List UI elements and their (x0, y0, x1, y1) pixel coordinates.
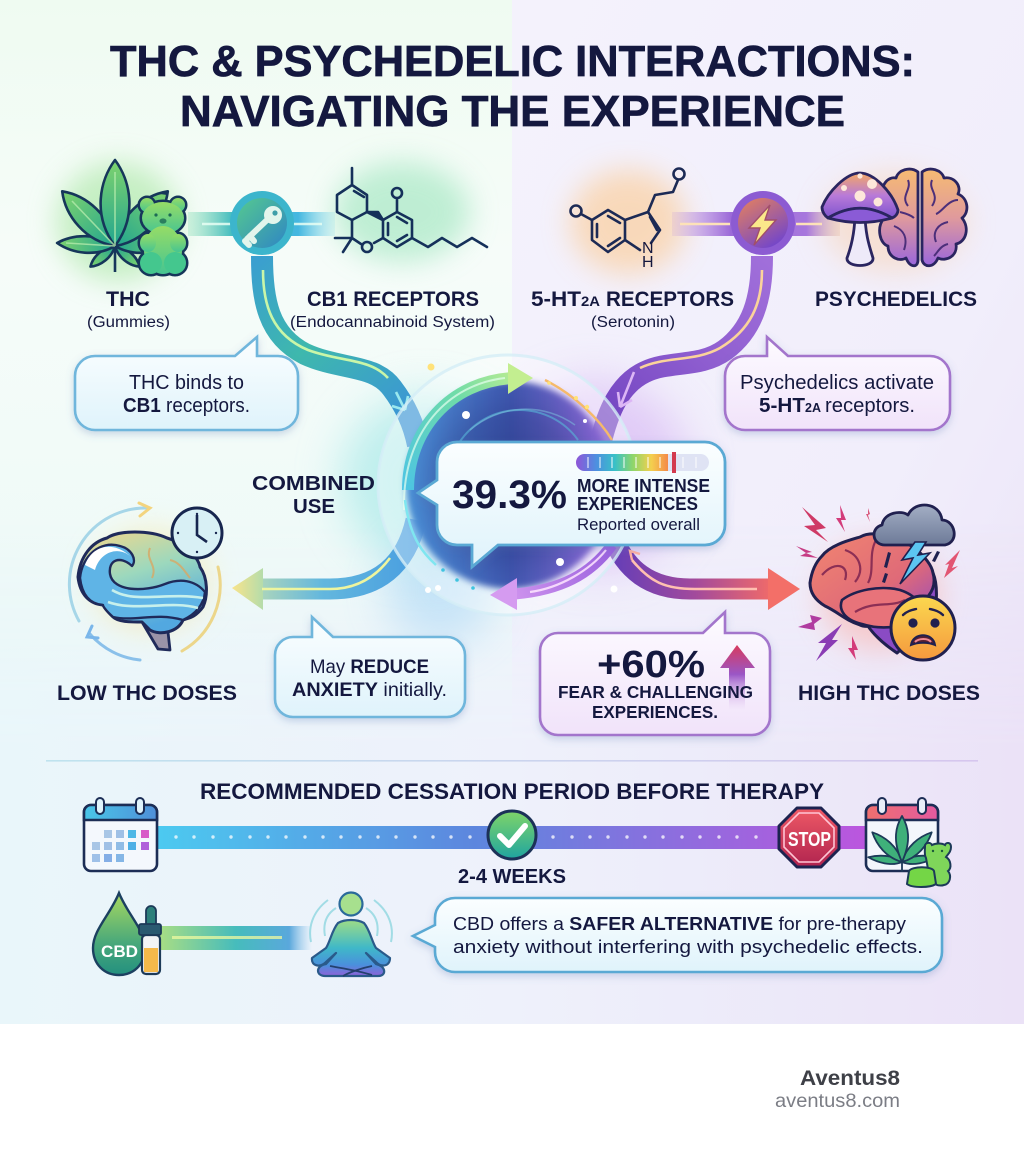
icon: low dose brain (69, 503, 220, 660)
icon: gummy bear (140, 190, 186, 274)
icon: up arrow (720, 645, 755, 710)
callout: CBD safer alternative: anxiety without interfering with psychedelic effects. (453, 936, 923, 957)
callout: psychedelics activate (725, 337, 950, 430)
molecule: serotonin (570, 168, 684, 252)
icon: lightning node (731, 191, 795, 255)
callout: 39.3 percent: MORE INTENSE (577, 475, 710, 496)
callout: THC binds: THC binds to (129, 372, 244, 394)
label: THC: (Gummies) (87, 314, 170, 331)
callout: reduce anxiety: ANXIETY initially. (292, 679, 447, 701)
label: psychedelics: PSYCHEDELICS (815, 288, 977, 311)
tube: THC path into center (262, 256, 418, 445)
callout: 39.3 percent: 39.3% (452, 473, 567, 517)
band: CBD to meditation (160, 926, 312, 950)
icon: stop sign: STOP (788, 829, 831, 851)
text: NH in serotonin: N (642, 240, 654, 257)
icon: calendar with cannabis and gummies (866, 798, 951, 887)
icon: mushroom (822, 173, 898, 266)
callout: psychedelics activate: receptors. (825, 395, 915, 417)
callout: plus 60 percent (540, 612, 770, 735)
icon: worried face (891, 596, 955, 660)
callout: plus 60 percent: FEAR & CHALLENGING (558, 682, 753, 702)
text: NH in serotonin (642, 240, 654, 271)
connector band: 5-HT2A to psychedelics (672, 212, 840, 236)
callout: psychedelics activate: 2A (805, 400, 822, 415)
footer brand: Aventus8 (800, 1066, 900, 1090)
icon: CBD oil drop and dropper (93, 893, 161, 975)
callout: psychedelics activate: 5-HT (759, 395, 805, 417)
center orb with arrows (378, 355, 638, 615)
gauge (576, 452, 709, 473)
icon: stop sign (779, 808, 839, 867)
callout: reduce anxiety: May REDUCE (310, 656, 429, 678)
callout: 39.3 percent (418, 442, 725, 567)
icon: meditating person (310, 892, 392, 976)
label: 2-4 weeks: 2-4 WEEKS (458, 866, 566, 888)
tube: psychedelic path into center (600, 256, 762, 445)
label: 5-HT2A receptors: (Serotonin) (591, 314, 675, 331)
timeline bar (157, 826, 865, 849)
callout: plus 60 percent: +60% (597, 644, 705, 686)
callout: 39.3 percent: EXPERIENCES (577, 493, 698, 514)
callout: CBD safer alternative: CBD offers a SAFER ALTERNATIVE for pre-therapy (453, 913, 907, 934)
connector band: THC to CB1 (188, 212, 335, 236)
label: 5-HT2A receptors: RECEPTORS (606, 288, 734, 311)
icon glows (56, 162, 967, 650)
label: combined use (252, 473, 375, 518)
callout: reduce anxiety (275, 617, 465, 717)
molecule: CB1 cannabinoid (335, 168, 487, 252)
callout: CBD safer alternative (413, 898, 942, 972)
label: 5-HT2A receptors: 5-HT (531, 288, 581, 311)
label: THC: THC (106, 288, 150, 311)
icon: storm cloud (874, 505, 954, 584)
label: CB1 receptors: (Endocannabinoid System) (290, 314, 495, 331)
title: NAVIGATING THE EXPERIENCE (180, 87, 845, 136)
icon: cannabis leaf (53, 160, 177, 272)
icon: brain (879, 169, 967, 266)
label: CB1 receptors (290, 288, 495, 331)
icon: calendar start (84, 798, 157, 871)
footer brand (775, 1066, 900, 1112)
tube: high dose arrow (612, 535, 800, 610)
callout: THC binds (75, 337, 298, 430)
tube: low dose arrow (232, 520, 416, 610)
callout: THC binds: CB1 receptors. (123, 395, 250, 417)
heading: cessation period: RECOMMENDED CESSATION PERIOD BEFORE THERAPY (200, 779, 824, 804)
callout: psychedelics activate: Psychedelics activate (740, 372, 934, 394)
label: 5-HT2A receptors: 2A (581, 293, 600, 309)
title (110, 37, 915, 136)
icon: CBD oil drop and dropper: CBD (101, 942, 138, 961)
callout: plus 60 percent: EXPERIENCES. (592, 702, 718, 722)
label: combined use: COMBINED (252, 473, 375, 495)
label: combined use: USE (293, 496, 335, 518)
label: high THC doses: HIGH THC DOSES (798, 682, 980, 705)
icon: key node (230, 191, 294, 255)
central glow (340, 380, 690, 645)
label: low THC doses: LOW THC DOSES (57, 682, 237, 705)
footer brand: aventus8.com (775, 1090, 900, 1112)
icon: clock (172, 508, 222, 558)
label: 5-HT2A receptors (531, 288, 734, 331)
icon: check mark (488, 811, 536, 859)
text: NH in serotonin: H (642, 254, 654, 271)
callout: 39.3 percent: Reported overall (577, 516, 700, 534)
icon: red lightning bolts (796, 505, 960, 661)
title: THC & PSYCHEDELIC INTERACTIONS: (110, 37, 915, 86)
icon: high dose brain (810, 534, 940, 653)
label: THC (87, 288, 170, 331)
label: CB1 receptors: CB1 RECEPTORS (307, 288, 479, 311)
